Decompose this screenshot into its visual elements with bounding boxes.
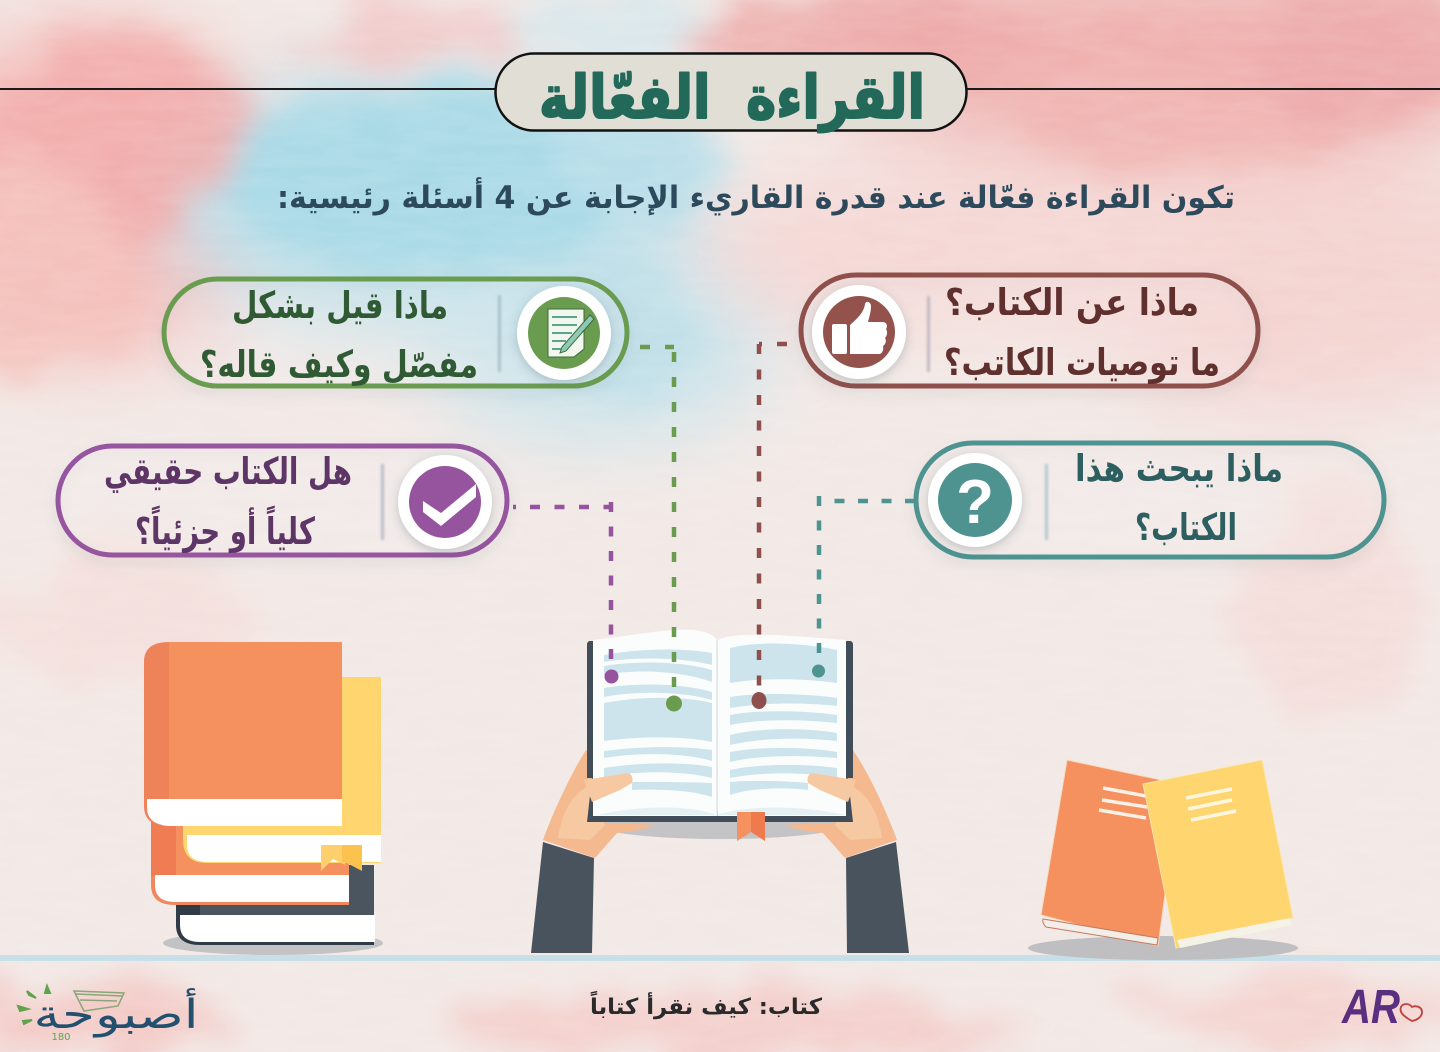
book stack <box>144 642 383 955</box>
question text <box>944 281 1220 384</box>
right thumb <box>808 773 856 802</box>
question text: ما توصيات الكاتب؟ <box>944 341 1220 384</box>
header rule <box>0 88 1440 90</box>
question text: ماذا يبحث هذا <box>1075 447 1283 490</box>
logo: Osbouha 180 <box>18 986 198 1043</box>
question text: هل الكتاب حقيقي <box>104 450 352 493</box>
open book held in hands <box>531 630 909 953</box>
icon: question mark <box>928 453 1022 547</box>
question text: ماذا قيل بشكل <box>232 284 448 327</box>
icon: check mark <box>398 455 492 549</box>
yellow book <box>183 677 381 863</box>
second orange book <box>151 820 349 905</box>
connector: teal <box>812 496 915 678</box>
logo: Osbouha 180: أصبوحة <box>34 988 198 1038</box>
subtitle: تكون القراءة فعّالة عند قدرة القاريء الإجابة عن 4 أسئلة رئيسية: <box>277 177 1235 216</box>
left thumb <box>584 773 632 802</box>
panel: teal question <box>916 443 1384 557</box>
title pill: القراءة الفعّالة <box>539 63 925 133</box>
two leaning books <box>1028 760 1298 960</box>
bottom dark book <box>176 900 375 945</box>
question text: ماذا عن الكتاب؟ <box>945 281 1199 324</box>
panel: brown question <box>801 275 1258 386</box>
orange book <box>1041 760 1180 946</box>
ribbon <box>737 812 765 841</box>
icon: document and pen <box>517 286 611 380</box>
connector: green <box>640 347 682 712</box>
question text: الكتاب؟ <box>1135 506 1237 549</box>
panel: green question <box>164 279 627 386</box>
question text <box>200 284 478 386</box>
icon: thumbs up <box>812 285 906 379</box>
logo: Osbouha 180: 180 <box>51 1032 71 1043</box>
page bottom tint <box>596 808 845 815</box>
right hand <box>783 750 897 858</box>
dark book corner <box>349 865 374 900</box>
question text <box>1075 447 1283 549</box>
top orange book <box>144 642 342 826</box>
right page lines <box>730 644 837 795</box>
icon: question mark: ? <box>956 468 994 537</box>
question text: مفصّل وكيف قاله؟ <box>200 343 478 386</box>
question text: كلياً أو جزئياً؟ <box>135 505 315 553</box>
left hand <box>543 750 657 858</box>
floor line <box>0 955 1440 961</box>
left page lines <box>604 649 712 797</box>
bookmark <box>321 845 362 871</box>
connector: brown <box>752 344 787 709</box>
right sleeve <box>846 842 909 953</box>
yellow book <box>1143 760 1293 948</box>
panel: purple question <box>58 446 507 555</box>
book cover <box>587 641 853 822</box>
footer source: كتاب: كيف نقرأ كتاباً <box>590 990 822 1020</box>
question text <box>104 450 352 553</box>
logo: AR heart: AR <box>1341 981 1400 1034</box>
left sleeve <box>531 842 594 953</box>
connector: purple <box>513 502 618 684</box>
book pages <box>593 630 846 816</box>
